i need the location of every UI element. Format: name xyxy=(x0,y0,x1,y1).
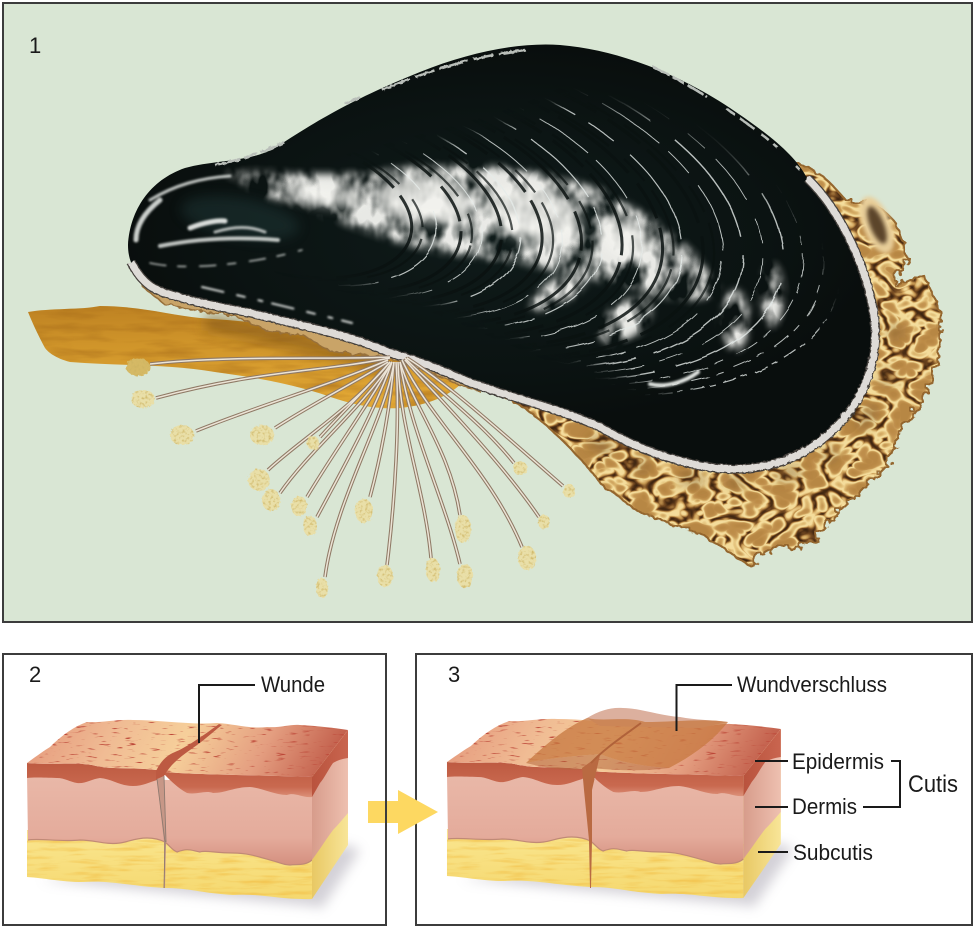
mantle shading along rim xyxy=(590,325,895,482)
wound cut in surface xyxy=(156,724,222,780)
mantle tissue xyxy=(470,163,942,567)
label: Dermis xyxy=(755,794,857,819)
label: Epidermis: Epidermis xyxy=(792,749,884,774)
byssus threads xyxy=(150,357,563,577)
panel number 2: 2 xyxy=(29,662,41,687)
panel 3: closed wound xyxy=(416,654,972,925)
label: Wundverschluss: Wundverschluss xyxy=(737,672,887,697)
fine growth lines xyxy=(338,92,836,395)
byssus plaques xyxy=(126,358,575,598)
bright centre of band xyxy=(284,171,656,267)
teal tip glint xyxy=(183,196,297,239)
panel 1: mussel xyxy=(3,0,972,622)
arrow between panels xyxy=(368,790,438,834)
panel 2: open wound xyxy=(3,654,386,925)
mantle frill along lower shell edge xyxy=(136,270,480,392)
label: Wundverschluss xyxy=(676,672,887,731)
label: Dermis: Dermis xyxy=(792,794,857,819)
wound gap edge line xyxy=(157,776,166,888)
closed wound gap xyxy=(582,755,600,888)
wound closure adhesive on the surface xyxy=(526,718,728,768)
shell highlights xyxy=(132,92,836,395)
panel number 1: 1 xyxy=(29,33,41,58)
skin block with wound xyxy=(27,720,360,908)
worn shell edge specks xyxy=(215,50,800,170)
wound gap in dermis xyxy=(157,776,166,888)
panel number 3: 3 xyxy=(448,662,460,687)
label: Subcutis xyxy=(758,840,873,865)
label: Epidermis xyxy=(755,749,884,774)
skin block with closure xyxy=(447,708,793,907)
tip highlights xyxy=(136,176,698,385)
shadow on foot below shell xyxy=(205,322,385,364)
main white ridge band xyxy=(225,165,783,352)
label: Cutis with bracket xyxy=(863,761,958,807)
label: Wunde xyxy=(199,672,325,743)
label: Wunde: Wunde xyxy=(261,672,325,697)
adhesive bulge above skin xyxy=(587,708,728,728)
black mussel shell xyxy=(117,0,887,469)
closure seam on surface xyxy=(591,723,641,763)
mussel foot xyxy=(28,306,463,408)
mantle inhalant opening xyxy=(853,192,901,258)
label: Cutis with bracket: Cutis xyxy=(908,771,958,798)
label: Subcutis: Subcutis xyxy=(793,840,873,865)
shell rim xyxy=(131,178,875,469)
adhesive over epidermis front xyxy=(526,754,669,770)
dark striations across the band xyxy=(370,159,713,348)
